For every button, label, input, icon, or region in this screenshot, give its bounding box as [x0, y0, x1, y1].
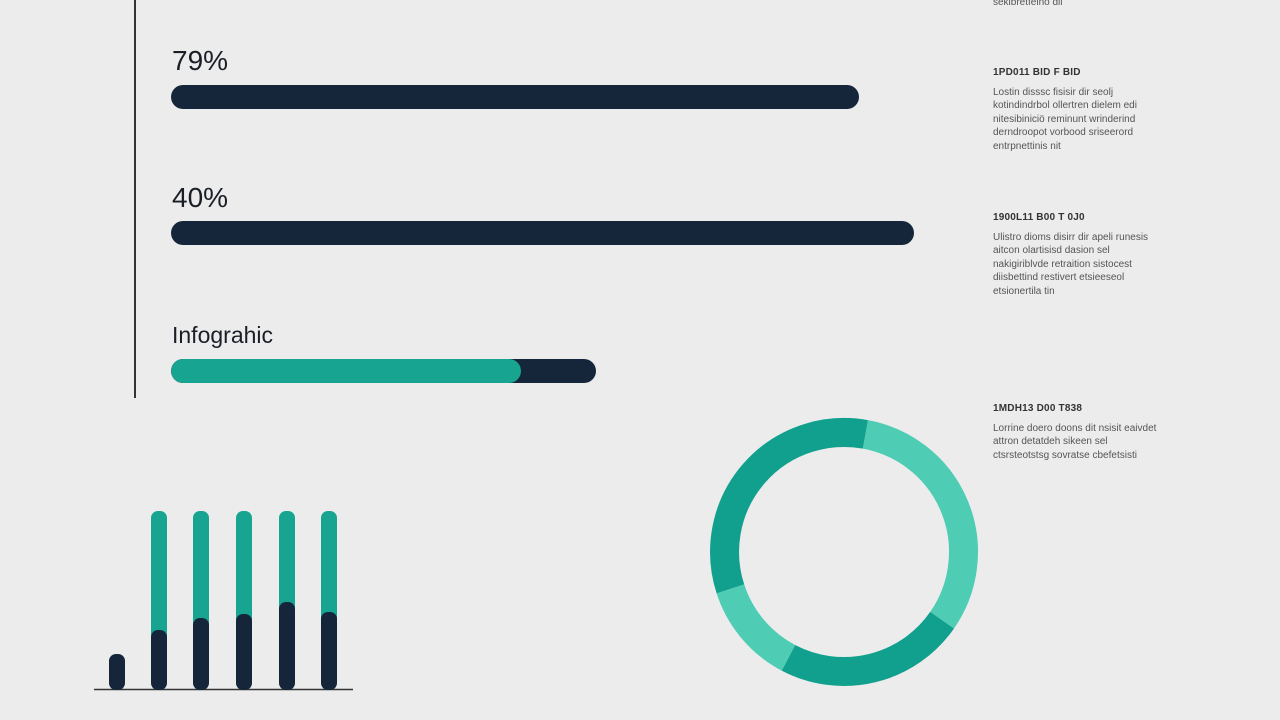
text block 1: 1PD011 BID F BID [993, 67, 1081, 78]
vertical bar chart [94, 511, 353, 690]
text block 3: 1MDH13 D00 T838 [993, 403, 1082, 414]
text block 3 [993, 403, 1156, 460]
bar: 79% [171, 85, 859, 109]
text block 2: Ulistro dioms disirr dir apeli runesis aitcon olartisisd dasion sel nakigiriblvde retraition sistocest diisbettind restivert etsieeseol etsionertila tin [993, 232, 1148, 296]
text block 3: Lorrine doero doons dit nsisit eaivdet attron detatdeh sikeen sel ctsrsteotstsg sovratse cbefetsisti [993, 422, 1156, 460]
label: Infographic: Infograhic [172, 322, 273, 348]
label: 40%: 40% [172, 182, 228, 213]
text block 1: Lostin disssc fisisir dir seolj kotindindrbol ollertren dielem edi nitesibiniciö reminunt wrinderind derndroopot vorbood sriseerord entrpnettinis nit [993, 86, 1137, 152]
text block 2: 1900L11 B00 T 0J0 [993, 212, 1085, 223]
vertical axis line [134, 0, 136, 398]
label: 79%: 79% [172, 45, 228, 76]
bar: teal progress [171, 359, 596, 383]
bar: 40% [171, 221, 914, 245]
